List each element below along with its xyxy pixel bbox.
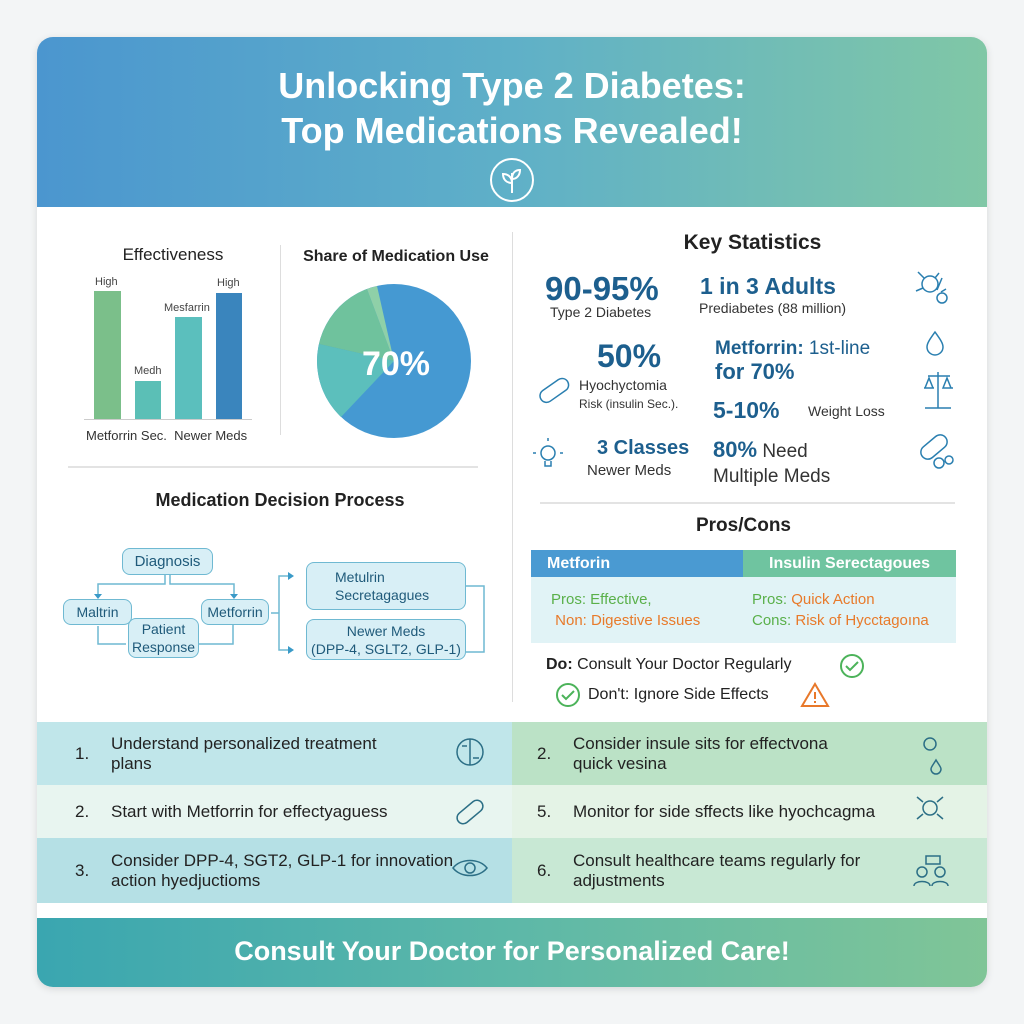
bar chart: High [95,276,118,288]
pros/cons table: Metforin [547,555,610,572]
flow chart: Response [132,639,195,655]
key statistics: Newer Meds [587,462,671,479]
pros/cons table: Cons: Risk of Hycctagoına [752,612,929,629]
bottom rows: 6. [537,860,551,880]
key statistics: Metforrin: 1st-line [715,338,870,359]
pie chart: Share of Medication Use [303,248,489,265]
bottom rows [37,722,987,903]
flow chart [63,490,485,660]
key statistics: Key Statistics [684,231,821,254]
key statistics: 5-10% [713,397,779,423]
icon: leaf [490,158,534,202]
flow chart: Secretagagues [335,587,429,603]
bottom rows: 1. [75,744,89,762]
flow chart: Medication Decision Process [155,490,405,510]
pie chart: 70% [362,345,430,383]
bottom rows: 2. [537,744,551,762]
flow chart: Newer Meds [347,622,425,638]
key statistics: Prediabetes (88 million) [699,300,846,316]
bottom rows: 3. [75,860,89,880]
flow chart: Metulrin [335,569,385,585]
pie chart [303,248,489,438]
pros/cons table: Pros: Effective, [551,591,652,608]
bottom rows: Consider insule sits for effectvona quick vesina [573,734,828,772]
pros/cons table [531,515,956,643]
key statistics: 1 in 3 Adults [700,273,836,299]
bottom rows: 5. [537,802,551,820]
bottom rows: Consider DPP-4, SGT2, GLP-1 for innovation [111,850,453,870]
flow chart: Diagnosis [135,552,200,570]
bottom rows: 2. [75,802,89,820]
do / don't [546,654,864,707]
flow chart: Metforrin [207,604,263,620]
pros/cons table: Non: Digestive Issues [555,612,700,629]
icons [533,272,954,469]
pros/cons table: Pros/Cons [696,515,791,536]
bar chart [84,245,252,443]
bottom rows: Start with Metforrin for effectyaguess [111,802,388,820]
key statistics: Weight Loss [808,403,885,419]
pros/cons table: Insulin Serectagoues [769,555,930,572]
bottom rows: Consult healthcare teams regularly for adjustments [573,850,860,890]
flow chart: Maltrin [76,604,118,620]
key statistics: 90-95% [545,270,659,307]
footer banner [37,918,987,987]
key statistics: Multiple Meds [713,466,830,487]
bottom rows: Understand personalized treatment plans [111,734,377,772]
divider lines [512,232,513,702]
title [278,65,746,151]
key statistics: 80% Need [713,437,808,462]
bar chart: High [217,277,240,289]
bottom rows: action hyedjuctioms [111,870,260,890]
key statistics: Type 2 Diabetes [550,304,651,320]
key statistics: for 70% [715,359,794,384]
title: Unlocking Type 2 Diabetes: [278,65,746,106]
footer banner: Consult Your Doctor for Personalized Care! [234,936,790,966]
row icons [452,738,488,876]
bar chart: Effectiveness [123,245,223,264]
do / don't: Do: Consult Your Doctor Regularly [546,656,791,673]
key statistics: 3 Classes [597,437,689,459]
key statistics: Risk (insulin Sec.). [579,397,678,411]
key statistics: 50% [597,338,661,374]
title: Top Medications Revealed! [281,110,743,151]
header [37,37,987,207]
bottom rows: Monitor for side sffects like hyochcagma [573,802,875,820]
bar chart: Mesfarrin [164,302,210,314]
do / don't: Don't: Ignore Side Effects [588,686,769,703]
flow chart: Patient [142,621,185,637]
key statistics [533,231,954,487]
pros/cons table: Pros: Quick Action [752,591,875,608]
bar chart: Metforrin Sec. Newer Meds [86,428,247,443]
flow chart: (DPP-4, SGLT2, GLP-1) [311,640,461,656]
key statistics: Hyochyctomia [579,377,667,393]
bar chart: Medh [134,365,162,377]
